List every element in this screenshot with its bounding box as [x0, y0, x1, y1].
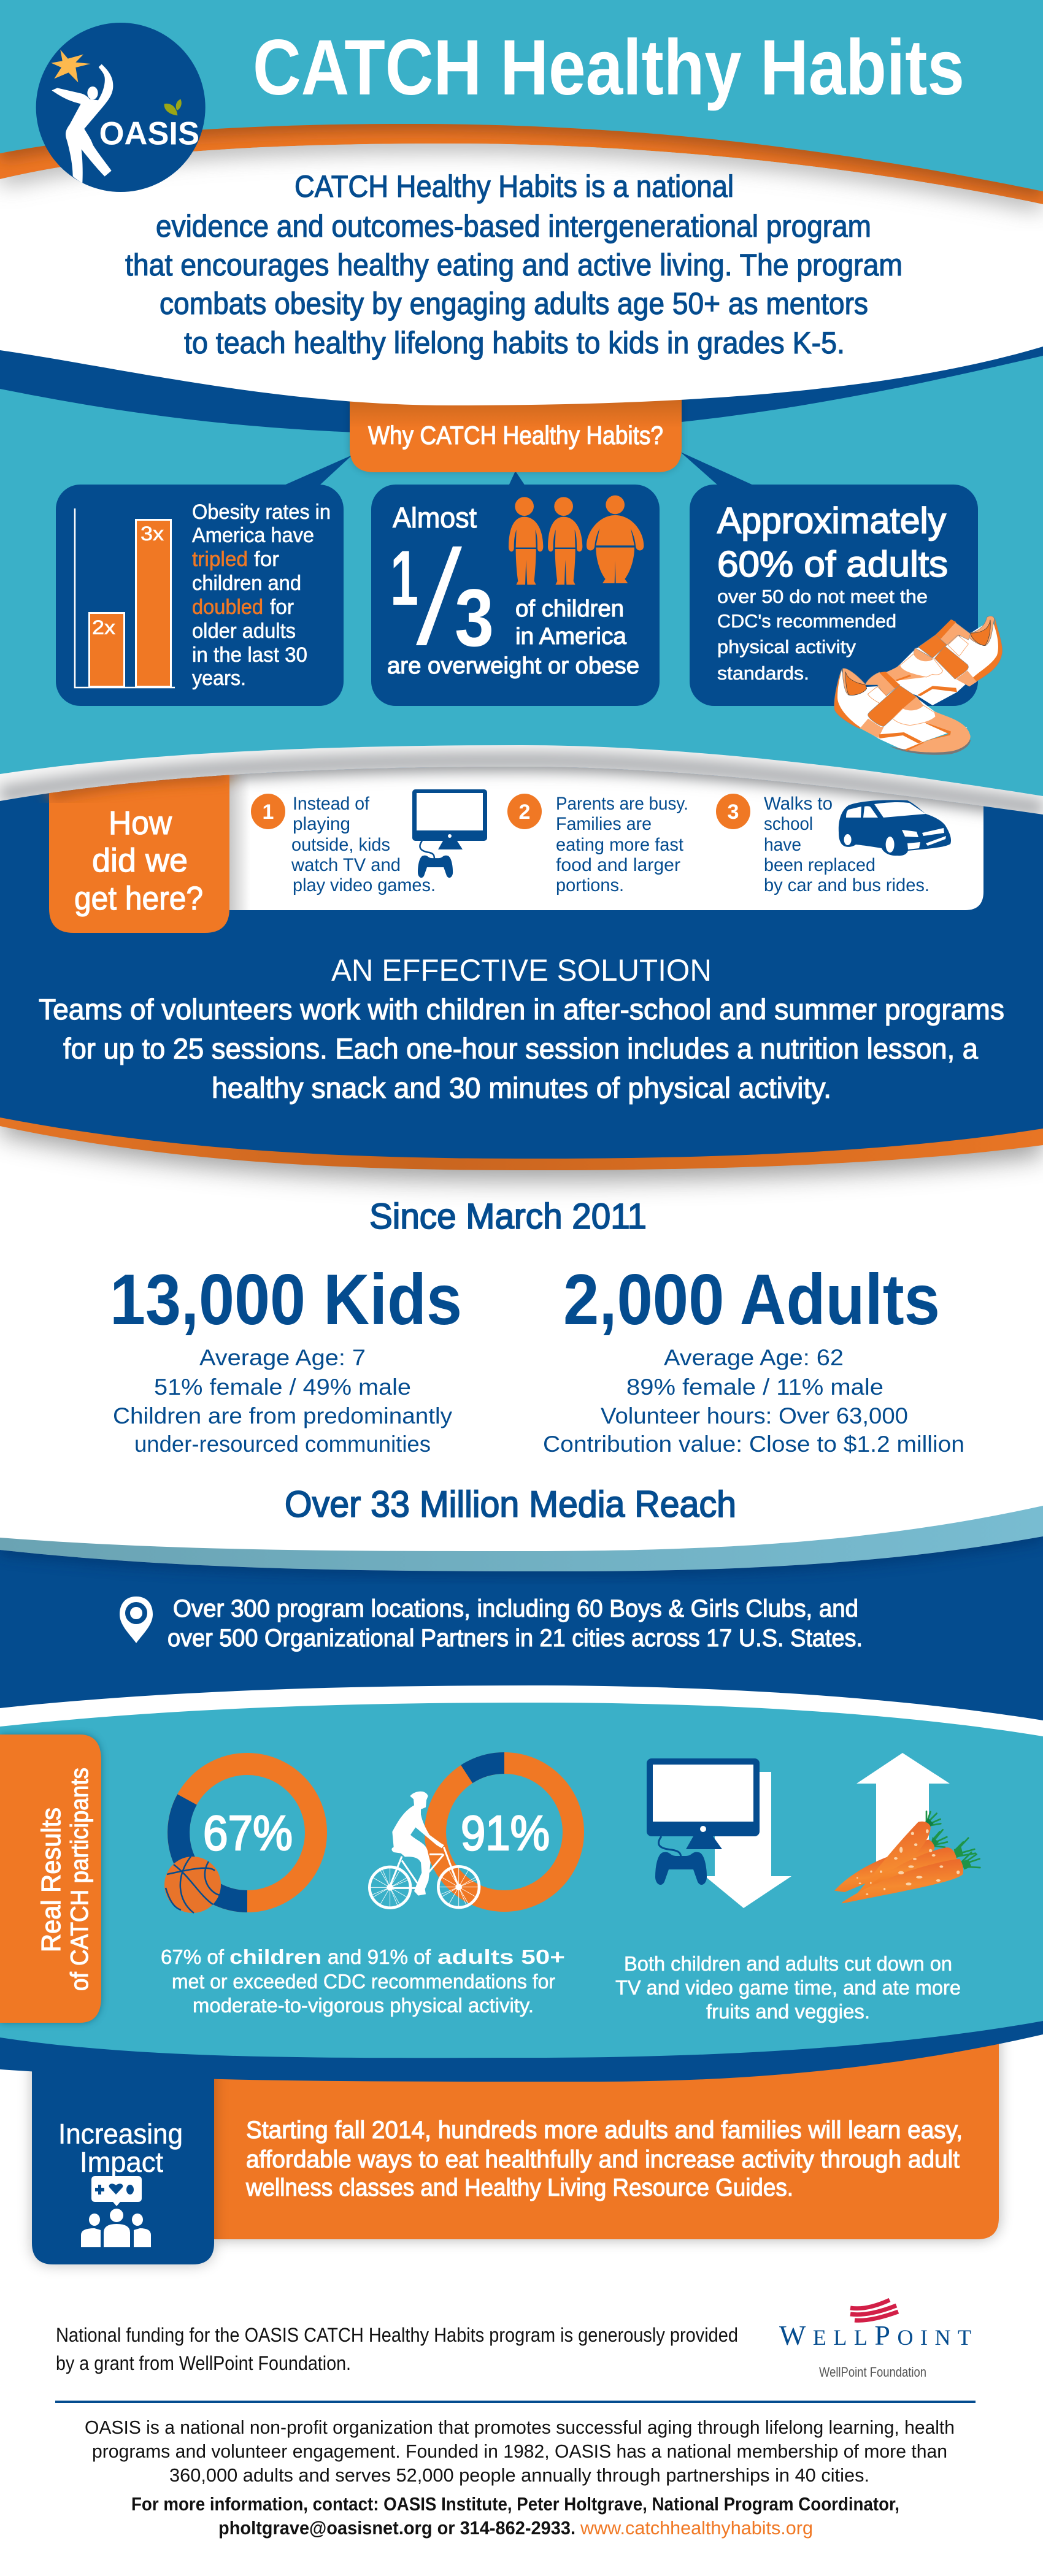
bar chart	[75, 508, 175, 688]
icon: location pin	[120, 1597, 153, 1643]
step 1: TV and video games	[251, 789, 487, 895]
step 1: TV and video games: playing	[293, 814, 350, 834]
step 3: car and bus	[716, 794, 951, 895]
icon: cyclist	[369, 1792, 479, 1908]
icon: carrots	[834, 1811, 980, 1903]
heading: media reach: Over 33 Million Media Reach	[285, 1484, 736, 1525]
impact text	[245, 2117, 963, 2201]
shadow below solution section	[0, 1104, 1043, 1181]
stat: kids: Children are from predominantly	[113, 1403, 453, 1428]
intro paragraph: to teach healthy lifelong habits to kids in grades K-5.	[184, 326, 845, 360]
step 3: car and bus: school	[764, 814, 813, 834]
intro paragraph: CATCH Healthy Habits is a national	[294, 169, 734, 204]
panel: increasing impact: Increasing	[58, 2118, 183, 2150]
panel: sixty percent of adults: CDC's recommended	[717, 610, 896, 632]
stat: kids	[110, 1259, 462, 1457]
panel: sixty percent of adults: over 50 do not meet the	[717, 586, 928, 607]
obesity text: in the last 30	[192, 643, 307, 667]
activity caption: 67% of	[161, 1945, 225, 1968]
panel: increasing impact: Impact	[80, 2146, 163, 2178]
bar chart: 2x	[92, 616, 115, 638]
heading box: why CATCH Healthy Habits	[350, 393, 682, 472]
panel: real results tab	[0, 1735, 101, 2023]
activity caption: children	[229, 1945, 321, 1968]
stat: kids: 13,000 Kids	[110, 1259, 462, 1340]
about text: programs and volunteer engagement. Founded in 1982, OASIS has a national membership of more than	[92, 2440, 947, 2462]
contact text: For more information, contact: OASIS Institute, Peter Holtgrave, National Program Coordinator,	[131, 2493, 899, 2515]
navy band under intro	[0, 331, 1043, 434]
panel: sixty percent of adults: physical activity	[717, 636, 856, 657]
icon: figure	[52, 64, 113, 183]
funding text: National funding for the OASIS CATCH Healthy Habits program is generously provided	[56, 2324, 738, 2346]
divider	[55, 2401, 976, 2403]
intro paragraph: evidence and outcomes-based intergenerational program	[156, 209, 871, 243]
step 2: fast food: food and larger	[556, 855, 680, 875]
stat: adults: Average Age: 62	[664, 1345, 844, 1370]
bar chart: 3x	[140, 523, 164, 545]
panel: sixty percent of adults: standards.	[717, 662, 809, 684]
panel: one third of children	[371, 485, 660, 706]
diet caption: fruits and veggies.	[706, 2000, 870, 2023]
contact text: www.catchhealthyhabits.org	[580, 2517, 813, 2539]
stat: adults: 2,000 Adults	[563, 1259, 940, 1340]
icon: TV and controller	[412, 789, 487, 878]
impact text: wellness classes and Healthy Living Resource Guides.	[245, 2174, 793, 2201]
logo: OASIS	[36, 23, 206, 192]
step 1: TV and video games: watch TV and	[291, 855, 401, 875]
orange how box: get here?	[74, 880, 203, 917]
solution text: Teams of volunteers work with children in after-school and summer programs	[39, 993, 1004, 1025]
step 3: car and bus: 3	[728, 800, 739, 824]
logo: WellPoint	[779, 2300, 971, 2380]
stat: kids: under-resourced communities	[134, 1432, 431, 1457]
panel: one third of children: of children	[515, 596, 624, 622]
front shoe	[834, 669, 971, 755]
orange band below solution section	[0, 1104, 1043, 1170]
step 1: TV and video games: outside, kids	[291, 835, 390, 855]
white intro lens	[0, 139, 1043, 405]
obesity text: America have	[192, 524, 314, 547]
obesity text: doubled	[192, 596, 263, 619]
step 3: car and bus: Walks to	[764, 794, 833, 814]
why heading connector triangles	[283, 452, 755, 486]
donut chart: 91 percent	[369, 1763, 573, 1908]
stat: adults: 89% female / 11% male	[626, 1374, 883, 1400]
step 3: car and bus: been replaced	[764, 855, 876, 875]
about text: OASIS is a national non-profit organization that promotes successful aging through lifelong learning, health	[85, 2417, 955, 2438]
step 2: fast food: eating more fast	[556, 835, 684, 855]
donut chart: 67 percent	[164, 1764, 316, 1913]
panel: how did we get here	[39, 767, 983, 933]
top teal background	[0, 0, 1043, 822]
contact text	[131, 2493, 899, 2539]
step 1: TV and video games: Instead of	[293, 794, 370, 814]
panel: sixty percent of adults: Approximately	[717, 500, 946, 541]
icon: car	[839, 800, 951, 856]
activity caption: met or exceeded CDC recommendations for	[172, 1970, 555, 1993]
navy band under results	[0, 2006, 1043, 2082]
stat: kids: Average Age: 7	[199, 1345, 366, 1370]
impact text: Starting fall 2014, hundreds more adults and families will learn easy,	[246, 2117, 963, 2144]
solution text	[39, 953, 1004, 1104]
panel: real results tab: Real Results	[36, 1807, 66, 1952]
obesity text: years.	[192, 667, 246, 690]
impact text: affordable ways to eat healthfully and increase activity through adult	[246, 2146, 960, 2173]
donut chart: 67 percent: 67%	[203, 1806, 293, 1860]
contact text: pholtgrave@oasisnet.org or 314-862-2933.	[218, 2517, 575, 2539]
obesity text: for	[254, 548, 279, 571]
orange how box	[49, 761, 229, 933]
heading: since March 2011: Since March 2011	[369, 1197, 647, 1236]
solution text: AN EFFECTIVE SOLUTION	[331, 953, 712, 987]
fraction one third: 3	[455, 573, 494, 664]
icon: up arrow	[856, 1753, 950, 1865]
activity caption	[161, 1945, 565, 2017]
panel: sixty percent of adults	[690, 485, 978, 706]
step 2: fast food	[507, 794, 688, 895]
panel: obesity rates	[56, 485, 344, 706]
diet caption	[615, 1952, 961, 2023]
logo wordmark: OASIS	[99, 115, 199, 151]
orange how box: How	[109, 805, 172, 841]
orange how box: did we	[92, 842, 188, 879]
activity caption: adults 50+	[437, 1945, 565, 1968]
fraction one third: 1	[390, 534, 418, 621]
about text	[85, 2417, 955, 2486]
locations text: Over 300 program locations, including 60 Boys & Girls Clubs, and	[173, 1595, 858, 1622]
activity caption: and 91% of	[328, 1945, 431, 1968]
stat: kids: 51% female / 49% male	[154, 1374, 411, 1400]
about text: 360,000 adults and serves 52,000 people annually through partnerships in 40 cities.	[169, 2464, 869, 2486]
navy solution section	[0, 767, 1043, 1159]
teal results lens	[0, 1703, 1043, 2058]
panel: one third of children: are overweight or obese	[387, 653, 639, 679]
intro paragraph: that encourages healthy eating and active living. The program	[125, 248, 903, 282]
logo: WellPoint: W ELLP OINT	[779, 2320, 971, 2351]
fraction one third	[390, 534, 494, 664]
solution text: healthy snack and 30 minutes of physical activity.	[212, 1071, 831, 1104]
obesity text: children and	[192, 572, 301, 595]
icon: three figures	[509, 496, 644, 585]
obesity text: tripled	[192, 548, 248, 571]
stat: adults: Contribution value: Close to $1.2 million	[543, 1432, 964, 1457]
diet caption: Both children and adults cut down on	[624, 1952, 952, 1975]
navy locations section: over 500 Organizational Partners in 21 cities across 17 U.S. States.	[167, 1625, 863, 1652]
icon: people	[81, 2209, 151, 2247]
step 1: TV and video games: play video games.	[293, 875, 436, 895]
obesity text: Obesity rates in	[192, 500, 331, 524]
curved grey band above section	[0, 745, 1043, 815]
obesity text: for	[270, 596, 294, 619]
heading box: why CATCH Healthy Habits: Why CATCH Healthy Habits?	[368, 421, 663, 450]
step 2: fast food: portions.	[556, 875, 624, 895]
back shoe	[869, 616, 1003, 705]
stat: adults: Volunteer hours: Over 63,000	[601, 1403, 908, 1428]
donut chart: 91 percent: 91%	[461, 1806, 550, 1860]
intro paragraph	[125, 169, 903, 360]
step 3: car and bus: by car and bus rides.	[764, 875, 929, 895]
logo: WellPoint: WellPoint Foundation	[819, 2364, 926, 2380]
icon: WellPoint flag	[850, 2300, 898, 2320]
white arc above results	[0, 1685, 1043, 2147]
step 1: TV and video games: 1	[263, 800, 274, 824]
panel: real results tab: of CATCH participants	[66, 1768, 93, 1991]
icon: TV and controller	[647, 1758, 760, 1885]
obesity text: older adults	[192, 619, 296, 643]
funding text: by a grant from WellPoint Foundation.	[56, 2352, 351, 2374]
activity caption: moderate-to-vigorous physical activity.	[193, 1994, 534, 2017]
diet caption: TV and video game time, and ate more	[615, 1976, 961, 1999]
panel: one third of children: in America	[515, 624, 627, 650]
icon: sneakers	[834, 616, 1003, 755]
icon: speech bubble	[91, 2176, 142, 2206]
stat: adults	[543, 1259, 964, 1457]
step 2: fast food: Parents are busy.	[556, 794, 688, 814]
icon: leaves	[164, 99, 182, 115]
navy locations section	[0, 1536, 1043, 1720]
solution text: for up to 25 sessions. Each one-hour session includes a nutrition lesson, a	[63, 1032, 979, 1065]
panel: one third of children: Almost	[393, 502, 477, 534]
panel: sixty percent of adults: 60% of adults	[717, 544, 948, 585]
obesity text	[192, 500, 331, 690]
light teal wave	[0, 1506, 1043, 1571]
white causes box	[229, 767, 983, 910]
step 2: fast food: 2	[519, 800, 530, 824]
funding text	[56, 2324, 738, 2374]
panel: increasing impact	[32, 2024, 999, 2264]
step 3: car and bus: have	[764, 835, 801, 855]
step 2: fast food: Families are	[556, 814, 652, 834]
icon: star	[51, 50, 91, 82]
icon: down arrow	[705, 1772, 791, 1908]
orange arc band	[0, 121, 1043, 204]
intro paragraph: combats obesity by engaging adults age 50+ as mentors	[160, 286, 868, 321]
icon: basketball	[164, 1857, 221, 1913]
